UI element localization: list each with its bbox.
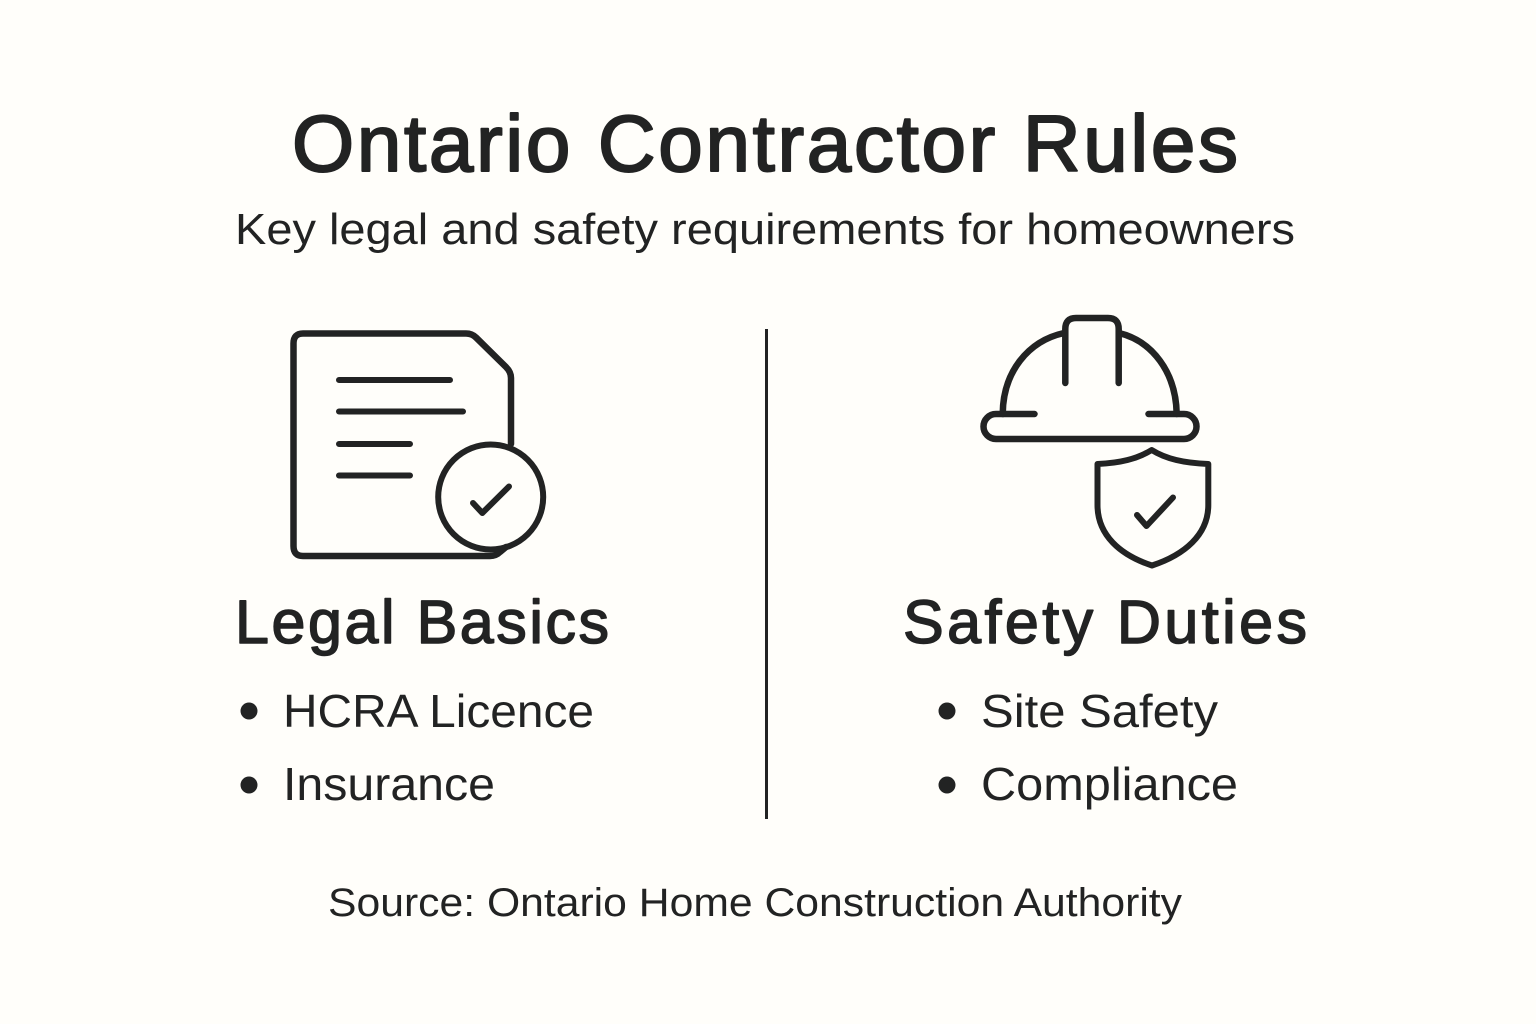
list: safety duties <box>938 685 1238 810</box>
source note: Source: Ontario Home Construction Authority <box>328 881 1182 925</box>
list: legal basics <box>240 685 594 810</box>
list: legal basics: Insurance <box>283 758 495 810</box>
list: safety duties: Compliance <box>981 758 1238 810</box>
panel: legal basics <box>235 334 609 810</box>
panel: safety duties <box>903 318 1307 810</box>
list: safety duties: Site Safety <box>981 685 1218 737</box>
icon: document with check badge <box>294 334 543 556</box>
icon: hard hat with shield <box>984 318 1208 566</box>
subtitle: Key legal and safety requirements for homeowners <box>235 205 1295 254</box>
title: Ontario Contractor Rules <box>292 99 1238 188</box>
heading: legal basics: Legal Basics <box>235 588 609 656</box>
list: legal basics: HCRA Licence <box>283 685 594 737</box>
heading: safety duties: Safety Duties <box>903 588 1307 656</box>
